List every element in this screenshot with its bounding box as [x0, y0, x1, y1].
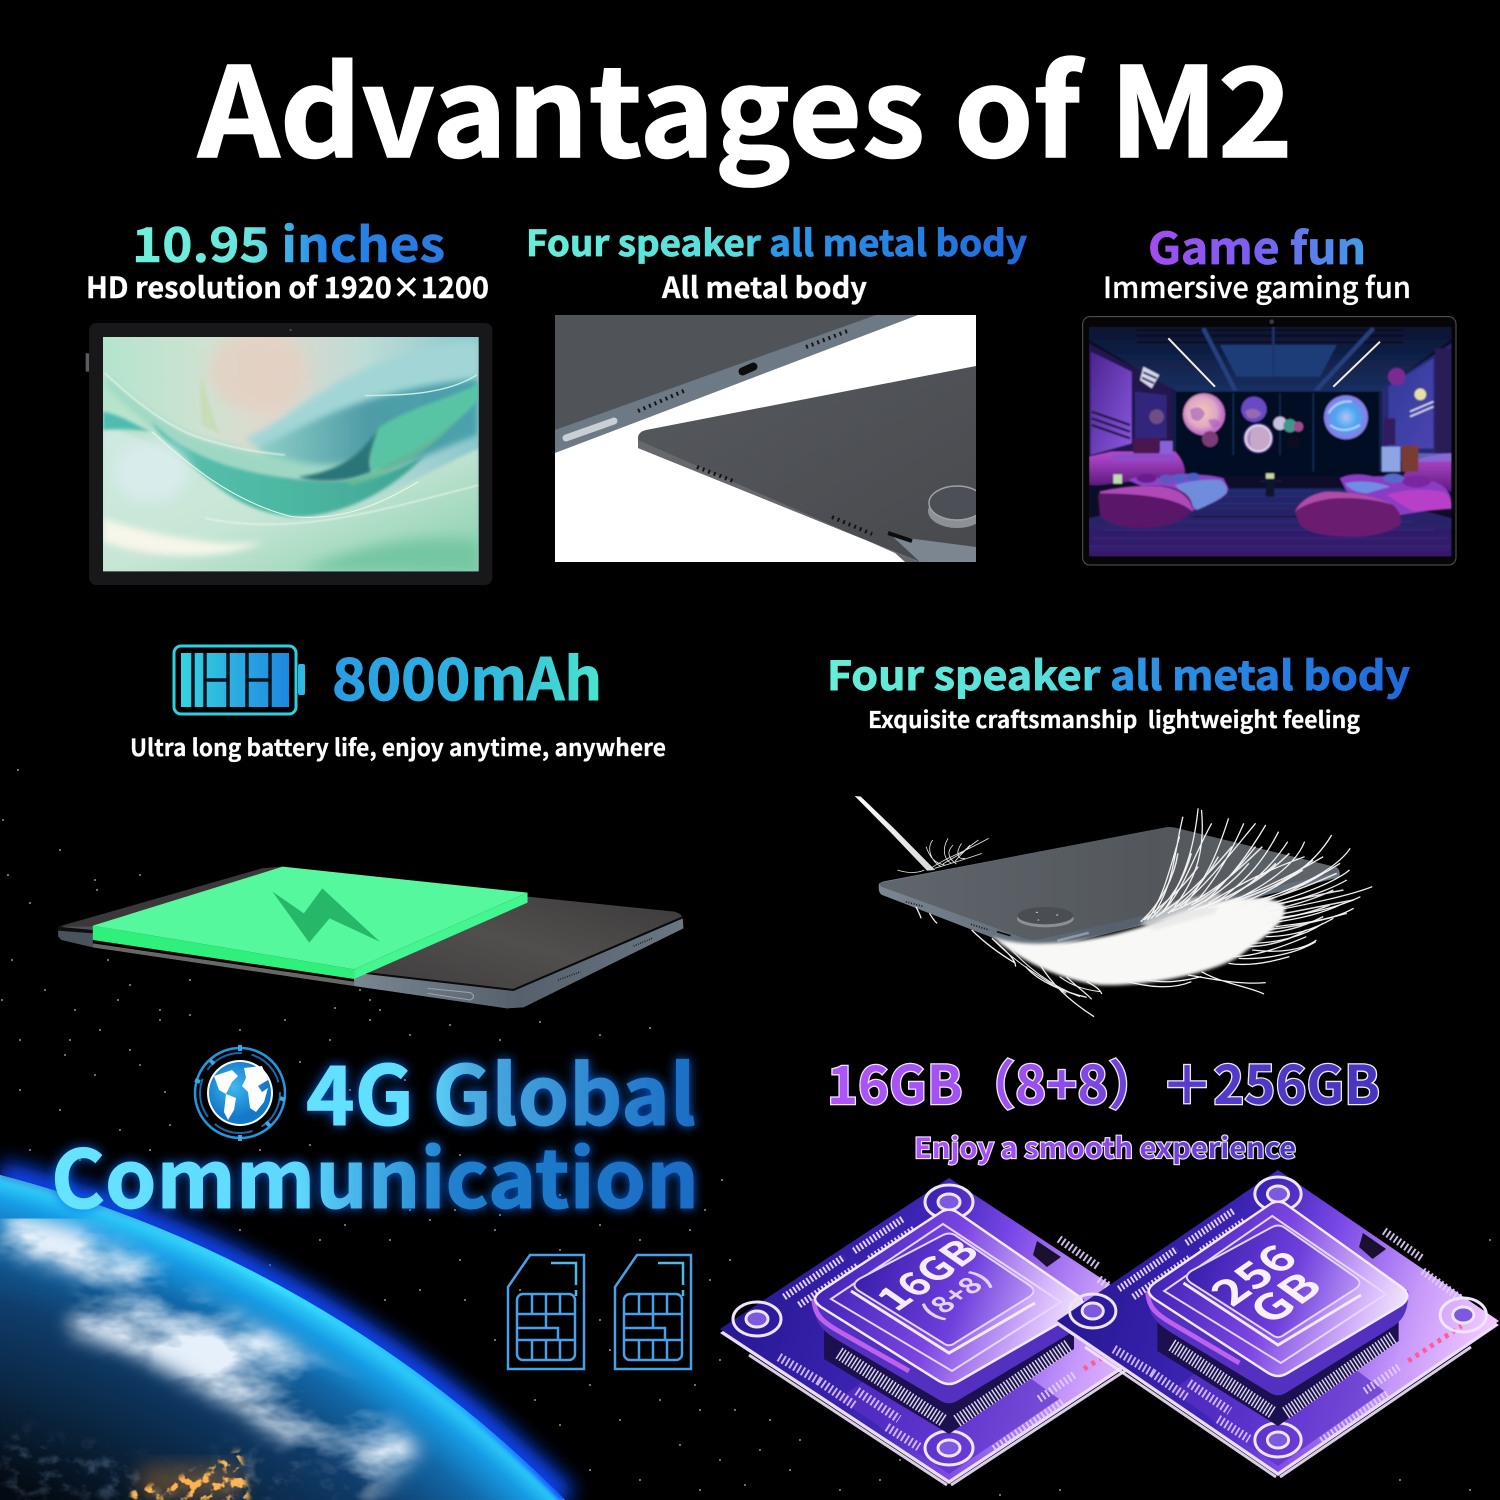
subheading: resolution: HD resolution of 1920×1200 [86, 265, 489, 307]
icon: SIM card 2 [615, 1255, 691, 1369]
icon: globe [195, 1045, 285, 1141]
earth [0, 1170, 570, 1500]
feature 1: screen size [86, 206, 492, 585]
image: tablet with wave wallpaper [86, 323, 492, 585]
heading: four speaker: Four speaker all metal body [827, 644, 1410, 702]
heading: 4G Global: 4G Global [306, 1030, 696, 1149]
heading: 10.95 inches: 10.95 inches [132, 206, 445, 276]
feature 5: lightweight body [827, 644, 1410, 1017]
feature 2: all metal body [526, 215, 1027, 562]
icon: battery [174, 646, 305, 714]
heading: memory capacity: 16GB（8+8）＋256GB [827, 1044, 1380, 1120]
image: tablet with feather [855, 796, 1372, 1017]
image: tablet with gaming room [1083, 317, 1456, 565]
subheading: craftsmanship: Exquisite craftsmanship lightweight feeling [868, 701, 1360, 735]
image: tablet edge close-up [555, 315, 986, 562]
chip: 256GB: 256 [1192, 1231, 1310, 1315]
feature 7: memory [720, 1044, 1499, 1485]
heading: game fun: Game fun [1148, 213, 1366, 277]
subheading: all metal body: All metal body [661, 265, 867, 307]
clouds [0, 1218, 431, 1500]
chip: 16GB [720, 1178, 1178, 1485]
feather body [992, 898, 1285, 985]
chip: 256GB: GB [1231, 1259, 1335, 1333]
land [0, 1426, 370, 1500]
feather quill [855, 796, 935, 871]
subheading: immersive gaming: Immersive gaming fun [1103, 265, 1411, 307]
feature 4: battery [57, 633, 683, 1008]
title: Advantages of M2 [197, 13, 1293, 193]
chip: 16GB: 16GB [860, 1228, 991, 1319]
feather strands [916, 808, 1372, 1017]
image: tablet with green battery [57, 867, 683, 1008]
heading: 8000mAh: 8000mAh [332, 633, 602, 717]
chip: 16GB: (8+8) [909, 1262, 1000, 1325]
heading: Communication: Communication [51, 1116, 699, 1232]
chip: 256GB [1057, 1170, 1499, 1477]
icon: SIM card 1 [508, 1255, 584, 1369]
heading: four speaker: Four speaker all metal body [526, 215, 1027, 267]
feature 3: game fun [1083, 213, 1456, 565]
subheading: battery life: Ultra long battery life, enjoy anytime, anywhere [130, 729, 666, 763]
subheading: smooth experience: Enjoy a smooth experience [914, 1127, 1296, 1167]
feature 6: 4G [51, 1030, 699, 1369]
city lights [127, 1447, 253, 1500]
starfield [2, 770, 1490, 1495]
